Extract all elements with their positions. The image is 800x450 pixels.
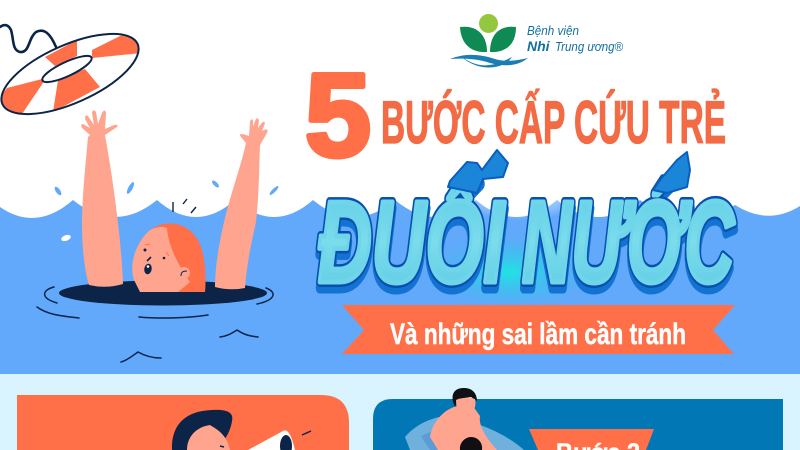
logo sun [479,14,498,33]
step tag [529,429,654,450]
title: 5: 5 [305,50,371,182]
pool ring [405,416,524,450]
rescuer head [453,388,477,407]
title: ĐUỐI NƯỚC [318,150,735,313]
sound mark [302,431,311,435]
logo waves [450,55,528,68]
dark outline [318,177,735,307]
ripples [37,287,273,362]
right arm and hand [215,118,268,289]
water hole [59,280,267,306]
hair [150,223,206,292]
person with megaphone [172,410,311,450]
panel: step 1 [17,395,349,450]
icon: life ring with rope [0,24,140,116]
facial features [143,244,190,279]
rope [0,25,56,52]
panel background [17,395,349,450]
surprise marks [173,199,196,213]
rescuer face [456,398,475,416]
white droplet [60,234,72,242]
3D extrusion: ĐUỐI [318,183,506,313]
ice face [318,177,735,307]
dark outline: ĐUỐI [318,177,506,307]
ribbon shape [342,305,735,354]
logo text: Bệnh viện [527,24,579,38]
subtitle ribbon [342,305,735,354]
pale haze behind title [450,170,590,220]
ring body [0,17,149,131]
child head [460,437,482,450]
logo leaves [460,27,487,52]
ring outline [0,17,149,131]
panel: step 2 [373,388,783,450]
teal glow behind title [415,230,605,314]
logo: Bệnh viện Nhi Trung ương [450,14,624,68]
water splashes [53,179,280,196]
pale section background [0,374,800,450]
inner water [421,428,480,450]
logo: Bệnh viện Nhi Trung ương: Nhi [527,38,551,54]
hair [172,410,232,450]
megaphone mouth [280,435,292,450]
eyebrow mark [220,446,224,447]
water background with waves [0,200,800,374]
ring hole [40,51,94,87]
panel background [373,399,783,450]
ribbon text: Và những sai lầm cần tránh [390,318,686,351]
ice accents on top marks [448,150,690,193]
illustration: drowning child [37,110,280,362]
ring orange sections [2,35,138,113]
megaphone [248,430,295,450]
left arm and hand [81,110,123,287]
face [132,227,190,292]
3D extrusion [318,183,735,313]
ice face: ĐUỐI [318,177,506,307]
logo: Bệnh viện Nhi Trung ương: Trung ương® [555,40,624,54]
face [187,425,230,450]
rescuer body [430,402,497,450]
